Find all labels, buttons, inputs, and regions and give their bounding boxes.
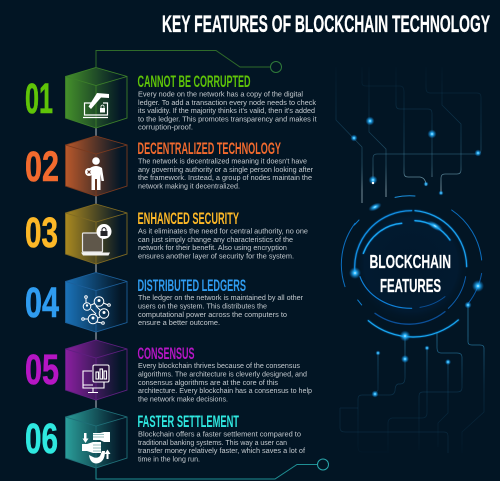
body 05: consensus algorithms are at the core of this: [138, 378, 278, 387]
icon: hands exchanging money: [82, 432, 110, 464]
body 05: [138, 361, 312, 404]
body 01: its validity. If the majority thinks it's valid, then it's added: [138, 106, 315, 115]
body 03: ensures another layer of security for the system.: [138, 252, 294, 260]
body 06: transfer money relatively faster, which saves a lot of: [138, 446, 306, 455]
soft ring glow: [355, 211, 467, 337]
cube 01: [66, 68, 127, 128]
body 03: network for their benefit. Also using encryption: [138, 243, 287, 252]
spine links between cubes: [90, 128, 102, 418]
body 04: users on the system. This distributes the: [138, 302, 267, 310]
body 01: to the ledger. This promotes transparency and makes it: [138, 114, 317, 123]
heading 03: ENHANCED SECURITY: [138, 210, 239, 228]
body 05: algorithms. The architecture is cleverly designed, and: [138, 370, 307, 378]
body 01: corruption-proof.: [138, 123, 193, 132]
cube 04: [66, 272, 127, 332]
ring label: FEATURES: [380, 275, 441, 296]
top connector line: [96, 50, 282, 72]
body 05: the network make decisions.: [138, 394, 228, 404]
number 03: 03: [25, 209, 58, 257]
ring label: BLOCKCHAIN: [370, 251, 451, 272]
body 02: network making it decentralized.: [138, 182, 240, 190]
body 04: [138, 293, 303, 327]
cube 02: [66, 136, 127, 196]
feature 03: [25, 204, 308, 264]
body 01: Every node on the network has a copy of the digital: [138, 90, 303, 98]
body 06: Blockchain offers a faster settlement compared to: [138, 430, 301, 438]
heading 06: FASTER SETTLEMENT: [138, 413, 239, 431]
ring label: [370, 251, 451, 296]
icon: network of users: [82, 296, 110, 324]
glowing nodes: [349, 116, 484, 398]
body 05: Every blockchain thrives because of the consensus: [138, 361, 300, 370]
circuit lines above ring: [336, 67, 481, 203]
number 04: 04: [25, 279, 59, 327]
icon: person: [85, 157, 104, 190]
cube 03: [66, 204, 127, 264]
body 06: [138, 430, 306, 464]
body 06: time in the long run.: [138, 454, 200, 464]
body 01: ledger. To add a transaction every node needs to check: [138, 98, 316, 107]
heading 04: DISTRIBUTED LEDGERS: [138, 277, 246, 295]
body 03: As it eliminates the need for central authority, no one: [138, 226, 308, 236]
body 03: can just simply change any characteristics of the: [138, 235, 293, 244]
body 02: The network is decentralized meaning it doesn't have: [138, 156, 307, 166]
cube 05: [66, 340, 127, 400]
feature 04: [25, 272, 303, 332]
body 05: architecture. Every blockchain has a consensus to help: [138, 386, 312, 395]
body 04: computational power across the computers to: [138, 310, 287, 319]
number 05: 05: [25, 346, 59, 394]
icon: laptop and lock: [81, 224, 112, 256]
bottom connector line: [96, 459, 328, 479]
feature 02: [25, 136, 313, 196]
feature 01: [25, 68, 317, 132]
body 03: [138, 226, 308, 260]
body 04: The ledger on the network is maintained by all other: [138, 293, 303, 302]
number 01: 01: [25, 75, 53, 123]
cube 06: [66, 408, 127, 468]
feature 05: [25, 340, 312, 404]
body 06: traditional banking systems. This way a user can: [138, 438, 287, 447]
feature 06: [25, 408, 306, 468]
heading 01: CANNOT BE CORRUPTED: [138, 73, 251, 91]
glowing ring: [341, 196, 482, 337]
icon: analytics monitors: [83, 365, 109, 392]
heading 05: CONSENSUS: [138, 345, 194, 363]
heading 02: DECENTRALIZED TECHNOLOGY: [138, 140, 281, 158]
body 04: ensure a better outcome.: [138, 318, 220, 327]
number 06: 06: [25, 415, 58, 463]
number 02: 02: [25, 143, 59, 191]
body 02: [138, 156, 313, 190]
body 02: the framework. Instead, a group of nodes maintain the: [138, 173, 312, 182]
body 01: [138, 90, 317, 132]
body 02: any governing authority or a single person looking after: [138, 165, 313, 174]
icon: ballot box: [83, 93, 109, 118]
circuit lines below ring: [340, 305, 484, 453]
